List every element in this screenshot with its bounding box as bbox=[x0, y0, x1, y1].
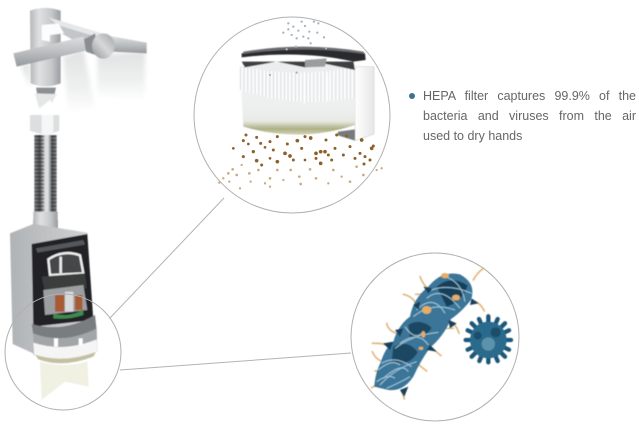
leader line: hand dryer base to filter circle bbox=[110, 198, 224, 318]
illustration: HEPA filter cross-section bbox=[218, 20, 383, 189]
illustration: rod-shaped bacterium bbox=[372, 268, 484, 399]
text: HEPA filter description bbox=[423, 89, 636, 143]
text: HEPA filter description: HEPA filter captures 99.9% of the bbox=[423, 89, 636, 103]
illustration: clean air particles above filter bbox=[269, 20, 327, 76]
panel: HEPA filter circle bbox=[194, 17, 390, 213]
circle: base magnifier outline bbox=[5, 294, 121, 410]
text: HEPA filter description: used to dry hands bbox=[423, 129, 522, 143]
illustration: trapped brown particles below filter bbox=[232, 133, 375, 166]
illustration: virus particle bbox=[466, 316, 511, 362]
text: HEPA filter description: bacteria and viruses from the air bbox=[423, 109, 636, 123]
illustration: faded particles bbox=[218, 164, 383, 189]
leader line: hand dryer base to bacteria circle bbox=[120, 353, 351, 370]
icon: bullet dot bbox=[409, 93, 415, 99]
icon: dryer base unit with motor bbox=[10, 220, 97, 400]
panel: bacteria and virus circle bbox=[351, 253, 519, 421]
icon: tap hand dryer head bbox=[13, 8, 147, 232]
